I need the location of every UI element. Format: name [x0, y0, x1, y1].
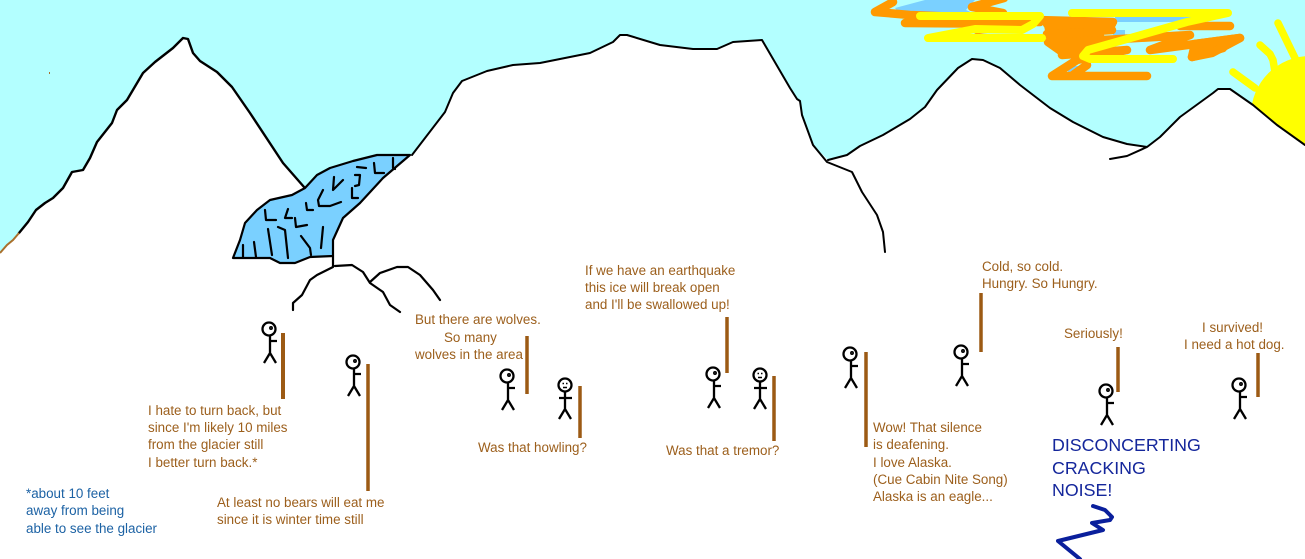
- sky: [0, 0, 1305, 260]
- icon: crack in ice: [1058, 506, 1112, 559]
- text: earthquake: If we have an earthquake: [585, 263, 735, 278]
- stick figure 5: [706, 368, 721, 408]
- text: wolves: So many: [444, 330, 497, 345]
- mountain fill: [0, 35, 1305, 300]
- text: turn back: I hate to turn back, but: [148, 403, 282, 418]
- sun: [1233, 23, 1305, 174]
- stick figure 10: [1232, 378, 1247, 419]
- brown specks: [0, 73, 50, 253]
- text: silence: I love Alaska.: [873, 455, 952, 470]
- orange scribble clouds: [875, 0, 1240, 76]
- stick figure 8: [954, 346, 969, 386]
- text: silence: Wow! That silence: [873, 420, 982, 435]
- text: bears: At least no bears will eat me: [217, 495, 384, 510]
- text: turn back: since I'm likely 10 miles: [148, 420, 288, 435]
- ice foot mounds: [293, 256, 440, 312]
- text: footnote: away from being: [26, 503, 124, 518]
- text: cold: Cold, so cold.: [982, 259, 1063, 274]
- stick figure 7: [844, 348, 858, 388]
- text: seriously: Seriously!: [1064, 326, 1123, 341]
- stick figure 2: [346, 356, 361, 396]
- text: turn back: I better turn back.*: [148, 455, 257, 470]
- stick figure 9: [1100, 384, 1114, 425]
- text: cracking noise: DISCONCERTING: [1052, 435, 1201, 455]
- glacier: [233, 155, 440, 312]
- text: cracking noise: CRACKING: [1052, 458, 1146, 478]
- text: survived: I survived!: [1202, 320, 1263, 335]
- text: wolves: But there are wolves.: [415, 312, 541, 327]
- yellow scribble clouds: [920, 13, 1228, 59]
- text: cracking noise: NOISE!: [1052, 480, 1112, 500]
- stick figure 4: [558, 378, 572, 419]
- text: earthquake: and I'll be swallowed up!: [585, 297, 730, 312]
- right mountains outline: [828, 59, 1305, 160]
- text: footnote: *about 10 feet: [26, 486, 110, 501]
- centre mountain outline: [412, 35, 885, 252]
- text: tremor: Was that a tremor?: [666, 443, 779, 458]
- text: silence: (Cue Cabin Nite Song): [873, 472, 1008, 487]
- text: survived: I need a hot dog.: [1184, 337, 1285, 352]
- blue sky patches behind scribble: [895, 0, 1191, 74]
- stick figure 1: [262, 322, 277, 363]
- left mountain outline: [19, 38, 304, 233]
- stick figure 3: [500, 370, 515, 410]
- stick figure 6: [754, 368, 767, 409]
- walking sticks: [283, 293, 1258, 491]
- text: turn back: from the glacier still: [148, 437, 263, 452]
- text: wolves: wolves in the area: [414, 347, 523, 362]
- text: cold: Hungry. So Hungry.: [982, 276, 1098, 291]
- mountains: [0, 35, 1305, 300]
- text: earthquake: this ice will break open: [585, 280, 720, 295]
- text: bears: since it is winter time still: [217, 512, 364, 527]
- text: footnote: able to see the glacier: [26, 521, 158, 536]
- text: silence: is deafening.: [873, 437, 949, 452]
- text: silence: Alaska is an eagle...: [873, 489, 993, 504]
- text: howling: Was that howling?: [478, 440, 587, 455]
